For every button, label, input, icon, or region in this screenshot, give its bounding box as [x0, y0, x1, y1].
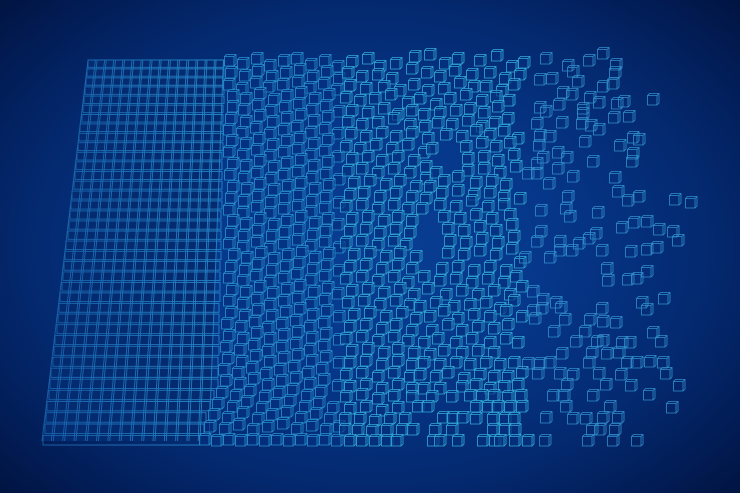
grid backing [42, 60, 224, 441]
dispersing cubes, bright centre band [345, 54, 528, 440]
regular wireframe grid [42, 60, 224, 445]
dispersing cubes, inner band [205, 58, 339, 440]
scattered cubes, sparse right side [525, 53, 691, 440]
